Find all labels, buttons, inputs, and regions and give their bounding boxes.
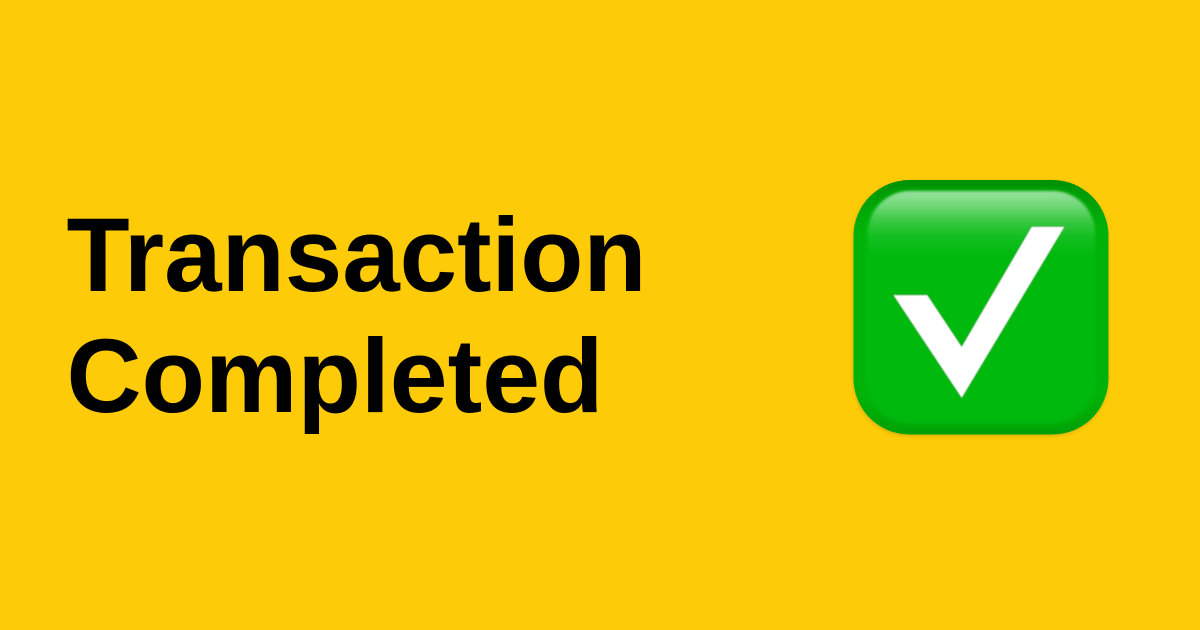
icon gloss — [868, 191, 1095, 423]
check mark — [893, 227, 1064, 398]
icon base — [854, 180, 1108, 434]
title — [66, 197, 646, 435]
title line 1: Transaction — [66, 197, 646, 314]
icon shadow — [853, 181, 1108, 436]
icon: green check mark button — [853, 180, 1108, 436]
title line 2: Completed — [66, 318, 604, 435]
icon face — [865, 191, 1096, 424]
